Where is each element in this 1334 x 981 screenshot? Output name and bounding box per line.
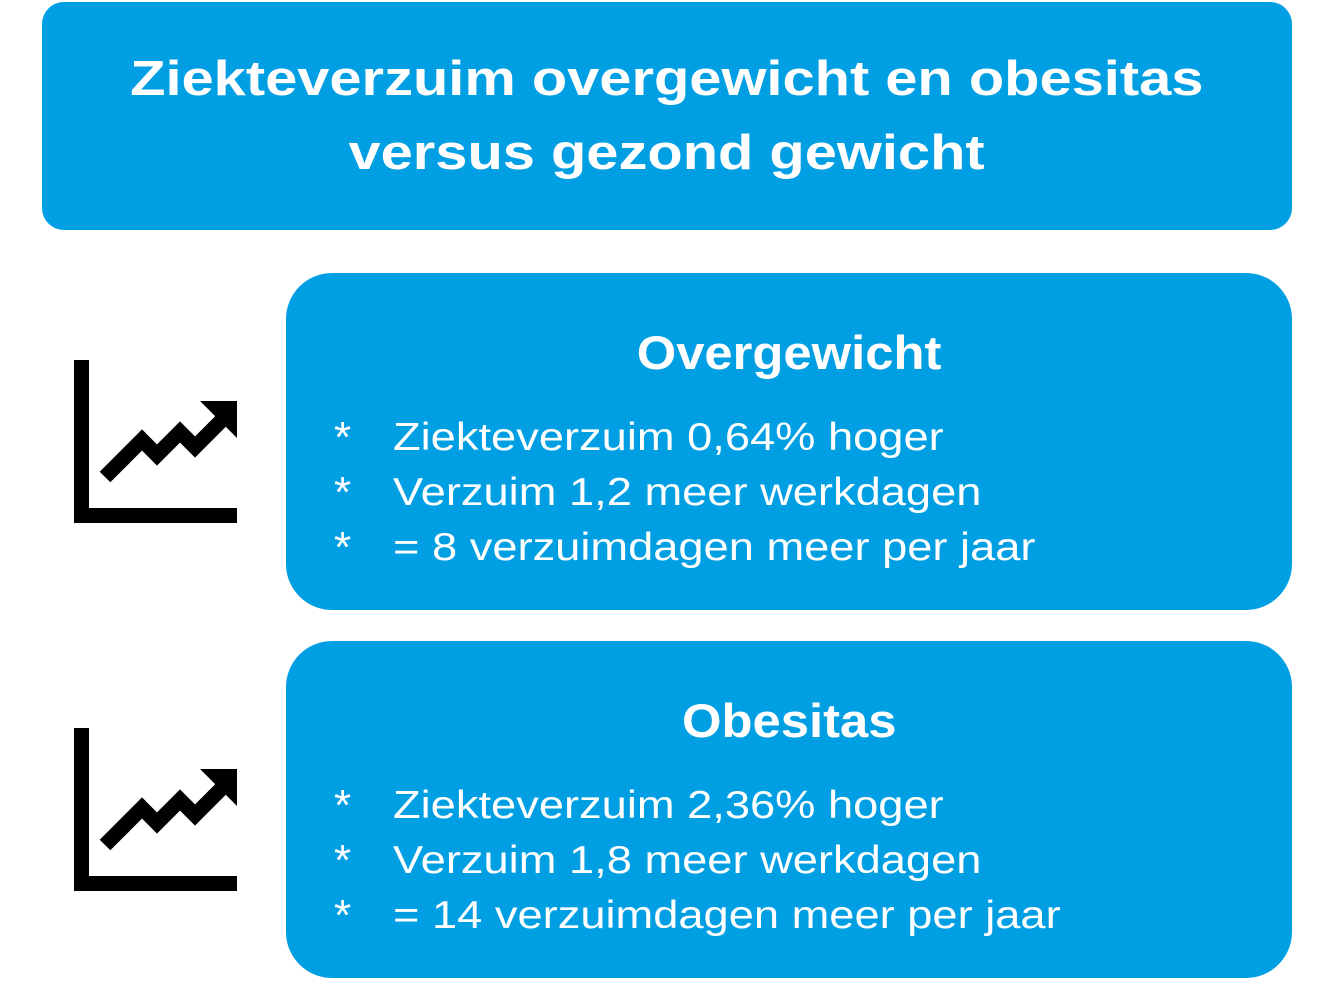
bullets: * bbox=[334, 836, 351, 885]
icon: chart up 1 bbox=[74, 360, 237, 523]
icon: chart up 2 bbox=[74, 728, 237, 891]
title: versus gezond gewicht bbox=[349, 126, 985, 180]
bullets: Verzuim 1,8 meer werkdagen bbox=[393, 839, 981, 882]
title bbox=[42, 2, 1292, 230]
bullets: * bbox=[334, 523, 351, 572]
bullets: * bbox=[334, 413, 351, 462]
bullets: * bbox=[334, 891, 351, 940]
bullets bbox=[334, 413, 1035, 572]
heading: Overgewicht bbox=[637, 326, 941, 379]
bullets: Verzuim 1,2 meer werkdagen bbox=[393, 471, 981, 514]
panel: overgewicht bbox=[286, 273, 1292, 610]
bullets: = 8 verzuimdagen meer per jaar bbox=[393, 526, 1035, 569]
bullets: * bbox=[334, 781, 351, 830]
bullets: Ziekteverzuim 2,36% hoger bbox=[393, 784, 944, 827]
heading: Obesitas bbox=[682, 694, 896, 747]
bullets: Ziekteverzuim 0,64% hoger bbox=[393, 416, 944, 459]
title: Ziekteverzuim overgewicht en obesitas bbox=[130, 52, 1204, 106]
bullets: = 14 verzuimdagen meer per jaar bbox=[393, 894, 1061, 937]
panel: obesitas bbox=[286, 641, 1292, 978]
bullets: * bbox=[334, 468, 351, 517]
bullets bbox=[334, 781, 1061, 940]
